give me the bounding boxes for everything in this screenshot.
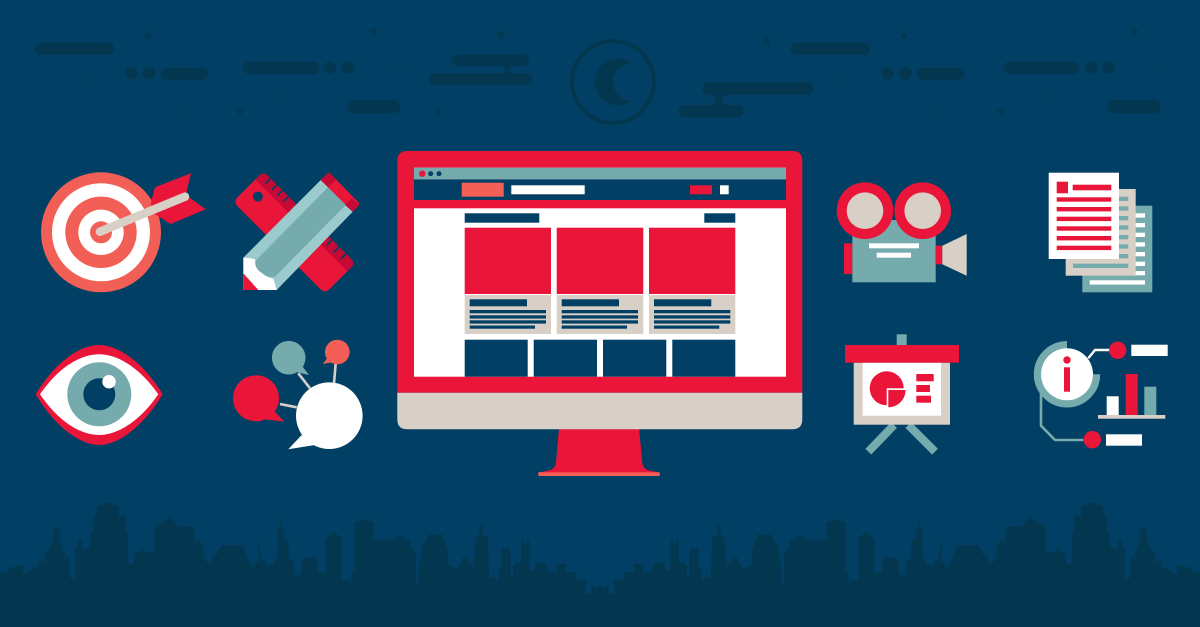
bar chart xyxy=(1098,374,1165,419)
icon: ruler and pencil xyxy=(233,171,359,294)
desktop monitor xyxy=(397,151,802,476)
callout top xyxy=(1109,342,1168,359)
icon: film camera xyxy=(837,182,967,282)
clouds left xyxy=(34,43,532,113)
content card 1 xyxy=(465,228,551,334)
browser title bar xyxy=(414,168,786,179)
night sky decoration: clouds, stars and moon xyxy=(34,26,1166,123)
connector lines xyxy=(1041,350,1110,440)
content card 2 xyxy=(557,228,643,334)
front page xyxy=(1049,173,1119,259)
icon: target with arrow xyxy=(41,172,206,292)
section headings xyxy=(465,213,735,223)
site header xyxy=(414,179,786,208)
legend bars xyxy=(916,374,934,403)
city skyline silhouette xyxy=(0,503,1200,627)
content card 3 xyxy=(649,228,735,334)
ruler xyxy=(233,171,355,294)
monitor stand xyxy=(538,428,660,476)
moon xyxy=(572,41,654,123)
web page on screen xyxy=(414,168,786,377)
monitor bezel xyxy=(397,151,802,429)
stars xyxy=(83,26,1166,117)
pie chart xyxy=(870,371,906,407)
clouds right xyxy=(678,43,1161,117)
icon: speech bubbles network xyxy=(233,340,363,449)
back page xyxy=(1082,206,1152,292)
icon: presentation board xyxy=(845,334,959,452)
callout bottom xyxy=(1084,431,1142,448)
middle page xyxy=(1066,189,1136,276)
icon: eye xyxy=(36,345,163,445)
bottom thumbnails xyxy=(465,340,735,377)
pencil xyxy=(243,172,359,290)
info circle xyxy=(1038,345,1096,404)
icon: information and data chart xyxy=(1038,342,1168,448)
icon: stacked documents xyxy=(1049,173,1152,292)
